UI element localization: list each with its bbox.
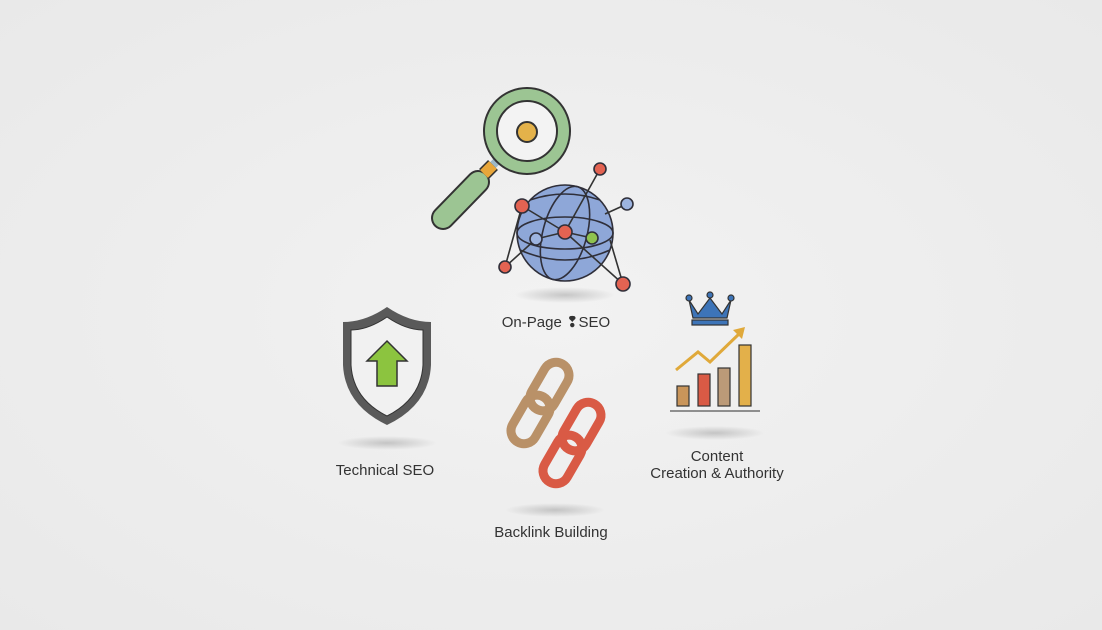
icon: crown and growth chart bbox=[665, 292, 765, 440]
label: Content Creation & Authority: Creation & Authority bbox=[650, 465, 784, 482]
icon: shield with arrow bbox=[337, 307, 437, 450]
icon: magnifying glass bbox=[443, 88, 570, 218]
label: Technical SEO: Technical SEO bbox=[336, 462, 434, 479]
label: Backlink Building: Backlink Building bbox=[494, 524, 608, 541]
label: Content Creation & Authority: Content bbox=[691, 448, 744, 465]
icon: chain links bbox=[505, 358, 606, 517]
label: On-Page SEO: On-Page ❢SEO bbox=[502, 314, 610, 331]
icon: network globe bbox=[499, 163, 633, 303]
